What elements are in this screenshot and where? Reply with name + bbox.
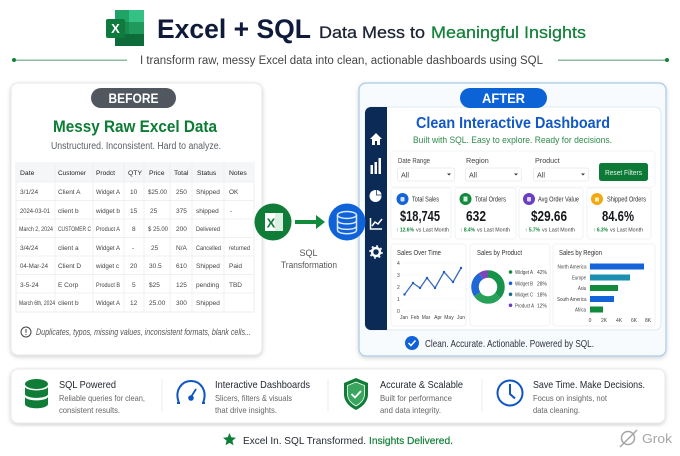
table rows: Widget A [96, 245, 121, 252]
table rows: shipped [196, 208, 219, 215]
flow caption: Transformation [281, 260, 337, 270]
icon: pie [370, 190, 382, 202]
benefit: accurate and scalable: Accurate & Scalable [380, 379, 463, 391]
kpi: total orders: Total Orders [475, 194, 506, 204]
icon: home [370, 133, 382, 145]
table rows: Client D [58, 263, 81, 270]
table rows: Product B [96, 282, 120, 289]
line chart: sales over time [391, 244, 466, 326]
table rows: March 6th, 2024 [19, 300, 55, 307]
kpi: avg order value: vs Last Month [542, 228, 575, 234]
table rows: 610 [176, 263, 187, 270]
table rows: 30.5 [149, 263, 162, 270]
kpi: shipped orders: Shipped Orders [607, 194, 646, 204]
table rows: 25 [151, 245, 159, 252]
table header row [20, 170, 247, 177]
line chart: sales over time: Jan [400, 315, 408, 321]
header [12, 10, 669, 67]
kpi: total orders [455, 188, 516, 239]
benefit: accurate and scalable [344, 378, 463, 415]
donut chart: sales by product: 42% [537, 270, 548, 276]
kpi: total orders: ↑ 8.4% [460, 228, 475, 234]
bar chart: sales by region: 2K [601, 318, 608, 324]
table header row: Date [20, 170, 35, 177]
line chart: sales over time: Apr [434, 315, 442, 321]
icon: gauge [177, 381, 205, 403]
table rows: pending [196, 282, 220, 289]
table rows: Paid [229, 263, 242, 270]
after badge: AFTER [482, 91, 525, 106]
kpi: shipped orders [587, 188, 651, 239]
line chart: sales over time: 0 [397, 309, 400, 315]
bar chart: sales by region: 8K [645, 318, 652, 324]
footer tagline: Insights Delivered. [369, 435, 453, 447]
kpi: shipped orders: vs Last Month [610, 228, 643, 234]
table rows: widget b [95, 208, 120, 215]
kpi: shipped orders: ↑ 6.3% [593, 228, 608, 234]
benefit: accurate and scalable: Built for performance [380, 394, 452, 403]
footer tagline [223, 433, 453, 447]
table rows: 25.00 [149, 300, 166, 307]
data problems note: Duplicates, typos, missing values, inconsistent formats, blank cells... [36, 327, 251, 337]
line chart: sales over time: 1 [397, 297, 400, 303]
kpi: shipped orders: 84.6% [602, 209, 634, 225]
flow caption [281, 248, 337, 270]
icon: excel logo [106, 10, 144, 46]
icon: database circle [328, 204, 366, 240]
table rows [19, 189, 250, 307]
table rows: Delivered [196, 226, 220, 233]
table rows: Widget A [96, 189, 121, 196]
line chart: sales over time: May [444, 315, 454, 321]
donut chart: sales by product: 28% [537, 281, 548, 287]
panel: after [359, 83, 666, 356]
table rows: Shipped [196, 189, 220, 196]
table rows: 8 [132, 226, 136, 233]
kpi: avg order value: Avg Order Value [538, 194, 579, 204]
table header row: Total [174, 170, 189, 177]
table rows: Product A [96, 226, 121, 233]
messy data table [16, 163, 254, 312]
before subheading: Unstructured. Inconsistent. Hard to analyze. [51, 141, 221, 152]
table header row: Customer [58, 170, 87, 177]
benefit: accurate and scalable: and data integrity. [380, 406, 441, 415]
footer tagline: Excel In. SQL Transformed. [243, 435, 366, 447]
icon: database [25, 379, 48, 408]
bar chart: sales by region: Asia [578, 286, 586, 292]
filters: All [401, 170, 409, 180]
table rows: returned [229, 245, 250, 252]
filters: All [469, 170, 477, 180]
table rows: Client A [58, 189, 81, 196]
table rows: client a [58, 245, 79, 252]
bar chart: sales by region: Sales by Region [559, 248, 602, 257]
watermark: grok: Grok [642, 431, 673, 446]
subtitle heading: data mess: Data Mess to [319, 24, 425, 42]
table rows: OK [229, 189, 239, 196]
bar chart: sales by region: 6K [631, 318, 638, 324]
icon: gear [370, 246, 382, 258]
table rows: Cancelled [196, 245, 221, 252]
icon: warning [21, 327, 31, 337]
kpi: total orders: 632 [466, 209, 486, 225]
arrow [295, 215, 325, 229]
table header row: Notes [229, 170, 247, 177]
kpi: avg order value: $29.66 [531, 209, 567, 225]
icon: clock [498, 380, 522, 406]
table rows: $25.00 [148, 189, 167, 196]
icon: star [223, 433, 236, 445]
bar chart: sales by region [553, 244, 655, 326]
flow caption: SQL [299, 248, 318, 258]
table header row: Status [197, 170, 217, 177]
table rows: N/A [176, 245, 188, 252]
kpi: avg order value [519, 188, 583, 239]
table rows: 15 [130, 208, 138, 215]
sidebar [365, 107, 387, 330]
table rows: 375 [176, 208, 187, 215]
table rows: CUSTOMER C [58, 226, 91, 233]
reset button [599, 163, 648, 181]
filters: All [537, 170, 545, 180]
table rows: 3-5-24 [20, 282, 39, 289]
table rows: $25 [149, 282, 160, 289]
benefit: interactive dashboards: Slicers, filters & visuals [215, 394, 292, 403]
transformation flow [254, 204, 366, 270]
reset button: Reset Filters [605, 168, 642, 177]
donut chart: sales by product: Widget B [515, 281, 534, 287]
table rows: widget c [95, 263, 120, 270]
watermark: grok [620, 430, 673, 447]
table rows: 2024-03-01 [20, 208, 50, 215]
benefit: sql powered: Reliable queries for clean, [59, 394, 145, 403]
benefit: interactive dashboards: that drive insights. [215, 406, 277, 415]
table rows: Shipped [196, 300, 220, 307]
icon: line chart [370, 218, 382, 229]
donut chart: sales by product: 12% [537, 303, 548, 309]
table rows: 300 [176, 300, 187, 307]
table rows: TBD [229, 282, 242, 289]
table rows: 250 [176, 189, 187, 196]
benefit: sql powered: consistent results. [59, 406, 120, 415]
before badge [91, 88, 176, 108]
table header row: Price [149, 170, 165, 177]
table rows: 3/1/24 [20, 189, 38, 196]
table header row: QTY [128, 170, 142, 177]
subtitle heading: meaningful insights: Meaningful Insights [431, 24, 586, 42]
tagline: I transform raw, messy Excel data into clean, actionable dashboards using SQL [140, 55, 544, 67]
before badge: BEFORE [108, 91, 158, 106]
table rows: 25 [150, 208, 158, 215]
after badge [460, 88, 547, 108]
table rows: E Corp [58, 282, 79, 289]
line chart: sales over time: 2 [397, 285, 400, 291]
bar chart: sales by region: 0 [589, 318, 592, 324]
table rows: 125 [176, 282, 187, 289]
kpi: total sales: vs Last Month [416, 228, 449, 234]
table rows: Widget A [96, 300, 121, 307]
line chart: sales over time: Jun [457, 315, 465, 321]
benefit: sql powered [25, 379, 145, 415]
icon: excel logo: X [111, 21, 120, 36]
table rows: 10 [130, 189, 138, 196]
benefit: sql powered: SQL Powered [59, 379, 116, 391]
kpi: total sales: Total Sales [412, 194, 439, 204]
kpi: avg order value: ↑ 5.7% [525, 228, 540, 234]
icon: bar chart [370, 158, 381, 174]
benefit: save time: data cleaning. [533, 406, 580, 415]
dashboard title: Clean Interactive Dashboard [416, 115, 610, 132]
icon: shield [344, 378, 368, 410]
title: Excel + SQL [157, 14, 311, 44]
bar chart: sales by region: North America [558, 264, 587, 270]
kpi: total sales [391, 188, 451, 239]
bar chart: sales by region: 4K [616, 318, 623, 324]
benefit: save time: Focus on insights, not [533, 394, 608, 403]
donut chart: sales by product: Sales by Product [477, 248, 523, 257]
table rows: 12 [130, 300, 138, 307]
icon: check badge [405, 336, 419, 350]
bar chart: sales by region: South America [557, 297, 587, 303]
before heading: Messy Raw Excel Data [53, 117, 217, 136]
icon: excel circle: X [267, 216, 276, 230]
table rows: client b [58, 300, 79, 307]
table rows: client b [58, 208, 79, 215]
table rows: - [132, 245, 134, 252]
table rows: March 2, 2024 [19, 226, 53, 233]
donut chart: sales by product: Product A [515, 303, 535, 309]
benefit: save time: Save Time. Make Decisions. [533, 379, 645, 391]
table rows: 04-Mar-24 [20, 263, 48, 270]
table rows: - [230, 208, 232, 215]
donut chart: sales by product: Widget A [515, 270, 534, 276]
table rows: 3/4/24 [20, 245, 38, 252]
filters: Date Range [398, 156, 430, 165]
panel: before [11, 83, 262, 355]
benefits strip [11, 369, 665, 423]
kpi: total sales: $18,745 [400, 209, 440, 225]
table rows: Shipped [196, 263, 220, 270]
line chart: sales over time: 4 [397, 261, 400, 267]
benefit: interactive dashboards [177, 379, 310, 415]
line chart: sales over time: 3 [397, 273, 400, 279]
filters: Product [535, 156, 560, 165]
filters [391, 151, 655, 187]
bar chart: sales by region: Africa [575, 308, 586, 314]
filters: Region [466, 156, 489, 165]
after caption: Clean. Accurate. Actionable. Powered by SQL. [425, 338, 594, 350]
donut chart: sales by product: 18% [537, 292, 548, 298]
donut chart: sales by product [470, 244, 550, 326]
table rows: $ 25.00 [148, 226, 168, 233]
line chart: sales over time: Feb [411, 315, 420, 321]
benefit: interactive dashboards: Interactive Dashboards [215, 379, 310, 391]
donut chart: sales by product: Widget C [515, 292, 533, 298]
table rows: 5 [132, 282, 136, 289]
table rows: 200 [176, 226, 187, 233]
table header row: Prodct [96, 170, 115, 177]
line chart: sales over time: Sales Over Time [397, 248, 441, 257]
bar chart: sales by region: Europe [572, 276, 586, 282]
dashboard subtitle: Built with SQL. Easy to explore. Ready for decisions. [413, 135, 612, 146]
benefit: save time [498, 379, 645, 415]
kpi: total orders: vs Last Month [477, 228, 510, 234]
dashboard [365, 107, 661, 330]
line chart: sales over time: Mar [422, 315, 431, 321]
kpi: total sales: ↑ 12.6% [396, 228, 414, 234]
table rows: 20 [130, 263, 138, 270]
